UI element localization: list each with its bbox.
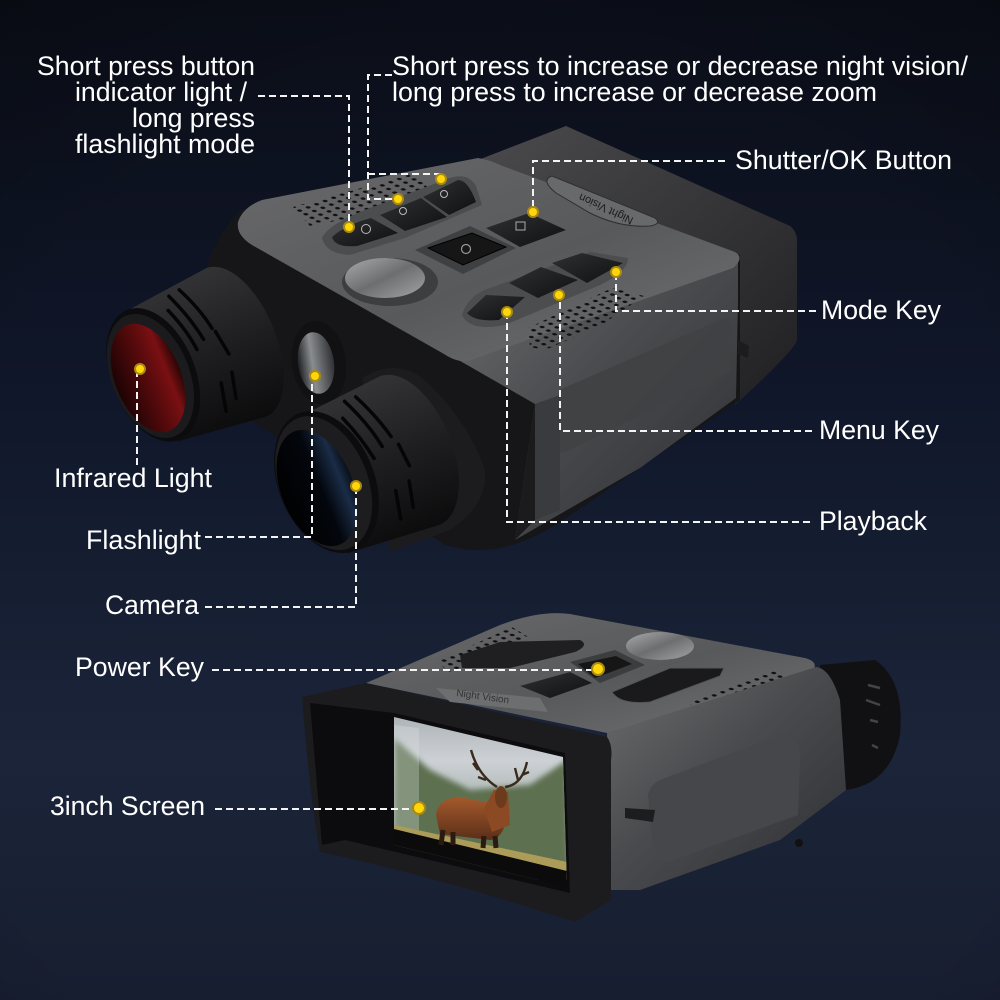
button: night vision / zoom minus <box>423 180 476 215</box>
label: night vision and zoom <box>392 51 968 107</box>
hood <box>302 683 612 922</box>
deer <box>436 750 529 848</box>
label: night vision and zoom: Short press to increase or decrease night vision/ <box>392 51 968 81</box>
dial <box>342 258 438 306</box>
eyepiece <box>820 660 901 790</box>
lens: flashlight <box>286 317 352 408</box>
device: rear view with screen <box>302 613 901 922</box>
button: power <box>415 226 516 274</box>
buttons <box>460 640 724 703</box>
label: playback: Playback <box>819 506 927 536</box>
speaker grills <box>436 627 790 714</box>
lens housing: camera <box>362 368 485 552</box>
name plate: Night Vision <box>456 688 510 706</box>
side panel <box>607 667 846 890</box>
label: flashlight: Flashlight <box>86 525 201 555</box>
label: short press button <box>37 51 255 159</box>
label: shutter: Shutter/OK Button <box>735 145 952 175</box>
button: flashlight <box>332 218 398 246</box>
rear hood <box>478 126 797 405</box>
speaker grill upper <box>293 173 428 226</box>
speaker grill lower <box>528 288 644 350</box>
side panel <box>455 258 749 540</box>
button: shutter <box>486 213 566 247</box>
lens: camera <box>253 361 479 576</box>
button: mode <box>552 253 623 283</box>
label: short press button: flashlight mode <box>75 129 255 159</box>
label: night vision and zoom: long press to increase or decrease zoom <box>392 77 877 107</box>
body shell <box>204 158 740 550</box>
button recess right <box>462 252 628 327</box>
label: infrared light: Infrared Light <box>54 463 212 493</box>
name plate: Night Vision <box>577 191 635 226</box>
lens: infrared <box>85 253 303 466</box>
callout lines <box>137 75 816 809</box>
label: power key: Power Key <box>75 652 204 682</box>
top plate <box>238 158 740 361</box>
top plate <box>366 613 815 733</box>
label: short press button: Short press button <box>37 51 255 81</box>
device: top binocular view <box>85 126 797 576</box>
label: short press button: long press <box>132 103 255 133</box>
callout dots <box>135 174 621 814</box>
hood opening <box>310 703 570 893</box>
button recess left <box>322 176 482 255</box>
name plate <box>436 688 548 712</box>
name plate <box>547 176 658 226</box>
button: playback <box>467 295 525 320</box>
screen <box>394 717 567 880</box>
button: menu <box>509 267 578 298</box>
label: short press button: indicator light / <box>75 77 247 107</box>
button: night vision / zoom plus <box>380 198 447 231</box>
label: menu key: Menu Key <box>819 415 939 445</box>
dial <box>626 632 694 660</box>
label: screen: 3inch Screen <box>50 791 205 821</box>
label: mode key: Mode Key <box>821 295 941 325</box>
label: camera: Camera <box>105 590 200 620</box>
